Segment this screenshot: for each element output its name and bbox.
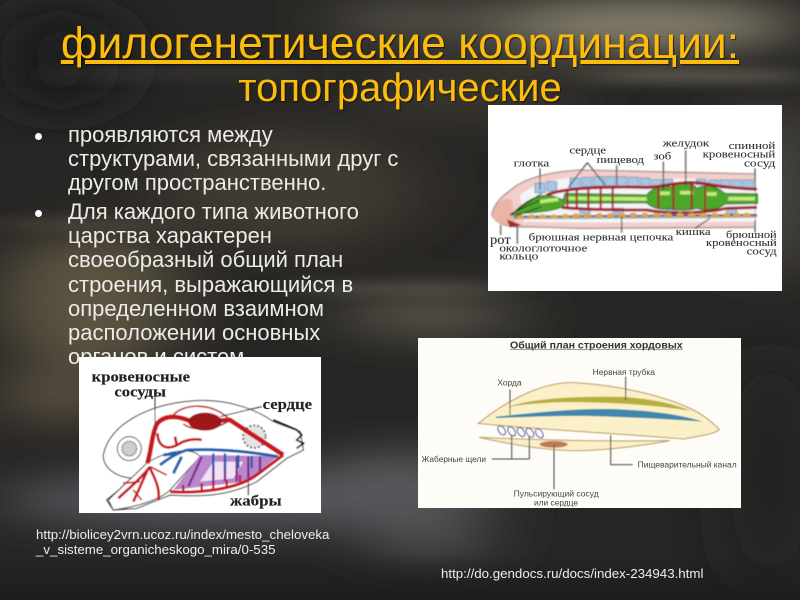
worm labels: кровеносный (703, 150, 776, 161)
chordate body (478, 383, 719, 439)
leader lines (492, 377, 633, 489)
bullet 2: определенном взаимном (68, 296, 324, 321)
text block: bullets (35, 122, 398, 446)
mollusc labels: жабры (230, 493, 282, 509)
neural tube (507, 397, 690, 411)
blue vessels (160, 450, 278, 473)
title (60, 19, 740, 110)
gill slits (496, 425, 545, 439)
red vessels (118, 417, 283, 502)
worm labels: желудок (661, 138, 710, 149)
bullet 2 (35, 199, 359, 369)
bullet 1: другом пространственно. (68, 170, 326, 195)
bullet 2: Для каждого типа животного (68, 199, 359, 224)
ventral nerve chain (513, 213, 757, 219)
title line 1: филогенетические координации: (61, 19, 739, 68)
lower body (479, 437, 670, 451)
foot (108, 451, 200, 510)
mollusc labels: кровеносные (92, 370, 191, 386)
worm labels: спинной (729, 141, 776, 152)
worm labels: сердце (569, 146, 606, 157)
worm body (492, 170, 755, 228)
source link: mollusc image (36, 527, 330, 557)
mollusc labels: сосуды (114, 384, 167, 400)
worm labels: брюшная нервная цепочка (529, 233, 674, 244)
worm labels: рот (490, 232, 511, 247)
worm labels: окологлоточное (499, 244, 588, 255)
worm labels: кольцо (499, 252, 538, 263)
chordate labels (422, 340, 737, 507)
gland circle (243, 425, 266, 448)
chordate labels: Хорда (497, 377, 522, 387)
pulsating vessel (540, 441, 568, 448)
image: chordate body plan (418, 338, 741, 508)
bullet 2: органов и систем (68, 344, 244, 369)
worm labels: сосуд (744, 158, 776, 169)
worm labels (490, 138, 777, 263)
gills (173, 455, 278, 490)
worm labels: кишка (676, 227, 711, 238)
worm labels: зоб (653, 151, 672, 162)
bullet 1: проявляются между (68, 122, 273, 147)
bullet 2: своеобразный общий план (68, 247, 343, 272)
mollusc labels (92, 370, 313, 509)
worm labels: сосуд (747, 246, 777, 257)
title line 2: топографические (238, 66, 562, 110)
worm labels: глотка (514, 158, 550, 169)
chordate labels: Нервная трубка (593, 367, 655, 377)
pharynx lines and leader lines (501, 150, 755, 244)
gonad circle (117, 437, 141, 461)
chordate labels: Жаберные щели (422, 454, 486, 464)
bullet 1: структурами, связанными друг с (68, 146, 398, 171)
worm labels: кровеносный (706, 238, 777, 249)
chordate labels: или сердце (534, 497, 578, 507)
bullet 1 (35, 122, 398, 451)
worm labels: брюшной (726, 230, 777, 241)
source link: chordate image: http://do.gendocs.ru/docs/index-234943.html (441, 566, 703, 581)
bullet 2: расположении основных (68, 320, 320, 345)
blood vessels (547, 183, 757, 213)
worm labels: пищевод (597, 155, 645, 166)
image: earthworm anatomy (488, 105, 782, 291)
image: mollusc circulatory system (79, 357, 321, 513)
chordate labels: Общий план строения хордовых (510, 340, 683, 352)
bullet 2: царства характерен (68, 223, 272, 248)
bullet 2: строения, выражающийся в (68, 272, 353, 297)
source link: mollusc image: _v_sisteme_organicheskogo_mira/0-535 (36, 542, 275, 557)
gut (512, 183, 757, 215)
notochord (496, 409, 703, 422)
chordate labels: Пульсирующий сосуд (514, 488, 599, 498)
shell outline (103, 401, 303, 510)
mollusc labels: сердце (263, 397, 313, 413)
source link: mollusc image: http://biolicey2vrn.ucoz.ru/index/mesto_cheloveka (36, 527, 329, 542)
blue segments (527, 177, 753, 214)
chordate labels: Пищеварительный канал (638, 460, 737, 470)
heart (188, 413, 222, 431)
